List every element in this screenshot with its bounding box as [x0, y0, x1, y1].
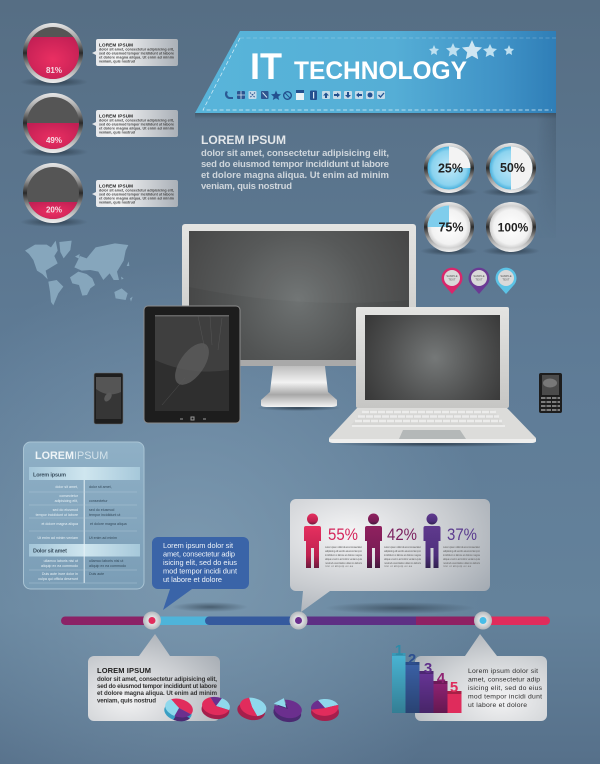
- device: tablet: [144, 306, 240, 423]
- callout: gauge 20% text: dolor sit amet, consectetur adipisicing elit,: [99, 188, 174, 192]
- table heading: LOREMIPSUM: [35, 450, 108, 462]
- pie chart 4: [271, 697, 304, 724]
- table section band 2: [29, 544, 140, 556]
- device: laptop: [329, 307, 536, 447]
- timeline node: red: [143, 612, 161, 630]
- callout: gauge 49% text: et dolore magna aliqua. Ut enim ad minim: [99, 126, 174, 130]
- bar chart: [392, 642, 462, 713]
- callout: lower left text bubble: dolor sit amet, consectetur adipisicing elit,: [97, 676, 217, 683]
- map pin: purple: TEXT: [475, 278, 483, 282]
- table left column: [36, 485, 79, 581]
- stat 37%: adipisicing elit sed do eiusmod tempor: [443, 549, 480, 553]
- stat 55%: nisi ut aliquip ex ea: [325, 564, 354, 568]
- title: [250, 46, 467, 87]
- intro text block: sed do eiusmod tempor incididunt ut labore: [201, 159, 389, 170]
- callout: blue speech bubble: isicing elit, sed do eius: [163, 558, 237, 567]
- gauge: 100%: [482, 202, 540, 256]
- table left column: et dolore magna aliqua: [41, 522, 78, 526]
- title: TECHNOLOGY: [294, 57, 467, 85]
- stars: [429, 40, 514, 59]
- table right column: ullamco laboris nisi ut: [89, 559, 123, 563]
- bar 3: 3: [424, 660, 432, 677]
- title: IT: [250, 46, 282, 87]
- person icon 42%: [365, 514, 382, 568]
- table right column: sed do eiusmod: [89, 508, 114, 512]
- table left column: adipisicing elit,: [55, 499, 78, 503]
- table right column: tempor incididunt ut: [89, 513, 120, 517]
- stat 42%: 42%: [387, 525, 417, 544]
- table left column: ullamco laboris nisi ut: [44, 559, 78, 563]
- pie chart 5: [311, 699, 339, 721]
- gauge: 75%: 75%: [438, 220, 464, 234]
- table left column: tempor incididunt ut labore: [36, 513, 78, 517]
- callout: gauge 20% text: et dolore magna aliqua. Ut enim ad minim: [99, 196, 174, 200]
- stat 42%: Lorem ipsum dolor sit amet consectetur: [384, 545, 421, 549]
- stat 42%: incididunt ut labore et dolore magna: [384, 553, 422, 557]
- gauge: 49%: [23, 93, 84, 156]
- ribbon banner: [195, 31, 556, 119]
- callout: lower right text bubble: [415, 634, 547, 721]
- stat 55%: adipisicing elit sed do eiusmod tempor: [325, 549, 362, 553]
- gauge: 81%: 81%: [46, 66, 62, 75]
- table left column: Ut enim ad minim veniam: [37, 536, 78, 540]
- stat 37%: Lorem ipsum dolor sit amet consectetur: [443, 545, 480, 549]
- callout: gauge 20% text: [92, 180, 178, 207]
- gauge: 25%: [420, 143, 478, 196]
- gauge: 50%: [482, 143, 540, 196]
- table right column: Duis aute: [89, 572, 104, 576]
- table left column: aliquip ex ea commodo: [41, 564, 78, 568]
- gauge: 20%: [23, 163, 84, 226]
- gauge: 25%: 25%: [438, 162, 463, 176]
- callout: gauge 20% text: sed do eiusmod tempor incididunt ut labore: [99, 192, 174, 196]
- gauge: 75%: [420, 202, 478, 256]
- map pin: pink: SAMPLE: [446, 274, 458, 278]
- callout: blue speech bubble: mod tempor incidi dunt: [163, 566, 237, 576]
- stat 42%: nostrud exercitation ullamco laboris: [384, 561, 422, 565]
- callout: gauge 49% text: dolor sit amet, consectetur adipisicing elit,: [99, 118, 174, 122]
- intro text block: LOREM IPSUM: [201, 133, 286, 147]
- table left column: culpa qui officia deserunt: [38, 577, 78, 581]
- callout: gauge 81% text: dolor sit amet, consectetur adipisicing elit,: [99, 48, 174, 52]
- map pin: pink: [442, 268, 463, 294]
- callout: lower left text bubble: LOREM IPSUM: [97, 666, 151, 675]
- callout: lower right text bubble: isicing elit, sed do eius: [468, 685, 543, 692]
- map pin: purple: SAMPLE: [473, 274, 485, 278]
- table left column: sed do eiusmod: [53, 508, 78, 512]
- stat 55%: Lorem ipsum dolor sit amet consectetur: [325, 545, 362, 549]
- device: left smartphone: [94, 373, 123, 424]
- person icon 37%: [424, 514, 440, 568]
- table left column: dolor sit amet,: [55, 485, 78, 489]
- map pin: pink: TEXT: [448, 278, 456, 282]
- table section band 1: [29, 467, 140, 480]
- callout: gauge 49% text: LOREM IPSUM: [99, 114, 133, 118]
- gauge: 81%: [23, 23, 83, 86]
- callout: gauge 81% text: et dolore magna aliqua. Ut enim ad minim: [99, 56, 174, 60]
- callout: lower left text bubble: veniam, quis nostrud: [97, 698, 156, 704]
- stat 42%: [384, 525, 422, 568]
- table right column: aliquip ex ea commodo: [89, 564, 126, 568]
- callout: blue speech bubble: amet, consectetur adip: [163, 550, 235, 558]
- bar 2: 2: [408, 651, 416, 668]
- table left column: Duis aute irure dolor in: [42, 572, 78, 576]
- timeline: [61, 612, 550, 630]
- intro text block: et dolore magna aliqua. Ut enim ad minim: [201, 170, 389, 181]
- callout: lower right text bubble: amet, consectetur adip: [468, 676, 540, 684]
- table section band 1: Lorem ipsum: [33, 472, 66, 478]
- stat 55%: nostrud exercitation ullamco laboris: [325, 561, 363, 565]
- person icon 55%: [304, 514, 321, 568]
- callout: gauge 49% text: sed do eiusmod tempor incididunt ut labore: [99, 122, 174, 126]
- table right column: consectetur: [89, 499, 108, 503]
- callout: gauge 49% text: veniam, quis nostrud: [99, 130, 135, 134]
- panel: data table: [24, 442, 144, 589]
- callout: gauge 81% text: sed do eiusmod tempor incididunt ut labore: [99, 52, 174, 56]
- callout: people statistics bubble: [290, 499, 490, 614]
- callout: gauge 49% text: [92, 110, 178, 137]
- laptop trackpad: [399, 430, 466, 439]
- world map: [25, 241, 133, 305]
- stat 55%: 55%: [328, 525, 358, 544]
- bar 1: 1: [395, 642, 403, 659]
- callout: lower left text bubble: [88, 634, 220, 721]
- stat 42%: aliqua ut enim ad minim veniam quis: [384, 557, 422, 561]
- bar 4: 4: [437, 670, 446, 687]
- intro text block: [201, 133, 389, 192]
- stat 37%: incididunt ut labore et dolore magna: [443, 553, 481, 557]
- callout: blue speech bubble: [152, 537, 249, 612]
- icon row: [225, 90, 385, 100]
- stat 55%: aliqua ut enim ad minim veniam quis: [325, 557, 363, 561]
- stat 42%: adipisicing elit sed do eiusmod tempor: [384, 549, 421, 553]
- gauge: 20%: 20%: [46, 206, 62, 214]
- intro text block: dolor sit amet, consectetur adipisicing elit,: [201, 148, 389, 159]
- table section band 2: Dolor sit amet: [33, 548, 67, 554]
- timeline node: purple: [290, 612, 308, 630]
- gauge: 50%: 50%: [500, 161, 525, 175]
- callout: gauge 81% text: [92, 39, 178, 66]
- callout: gauge 20% text: veniam, quis nostrud: [99, 200, 135, 204]
- map pin: cyan: SAMPLE: [500, 274, 512, 278]
- timeline node: cyan: [474, 612, 492, 630]
- gauge: 100%: 100%: [498, 220, 529, 234]
- callout: gauge 81% text: LOREM IPSUM: [99, 42, 133, 48]
- table right column: Ut enim ad minim: [89, 536, 117, 540]
- gauge: 49%: 49%: [46, 136, 62, 145]
- pie chart 2: [200, 695, 231, 721]
- callout: lower left text bubble: et dolore magna aliqua. Ut enim ad minim: [97, 690, 217, 697]
- callout: blue speech bubble: ut labore et dolore: [163, 575, 222, 584]
- stat 37%: [443, 525, 481, 568]
- stat 37%: aliqua ut enim ad minim veniam quis: [443, 557, 481, 561]
- stat 37%: nostrud exercitation ullamco laboris: [443, 561, 481, 565]
- table left column: consectetur: [59, 494, 79, 498]
- pie chart 3: [236, 695, 268, 723]
- map pin: purple: [469, 268, 490, 294]
- stat 37%: nisi ut aliquip ex ea: [443, 564, 472, 568]
- callout: gauge 81% text: veniam, quis nostrud: [99, 60, 135, 64]
- stat 42%: nisi ut aliquip ex ea: [384, 564, 413, 568]
- table right column: dolor sit amet,: [89, 485, 112, 489]
- callout: lower right text bubble: Lorem ipsum dolor sit: [468, 668, 538, 675]
- table right column: [89, 485, 127, 576]
- laptop keyboard: [351, 410, 505, 426]
- bar 5: 5: [450, 679, 458, 696]
- callout: lower right text bubble: ut labore et dolore: [468, 702, 527, 709]
- map pin: cyan: [496, 268, 516, 294]
- callout: lower right text bubble: mod tempor incidi dunt: [468, 694, 542, 700]
- map pin: cyan: TEXT: [502, 278, 510, 282]
- stat 55%: [325, 525, 363, 568]
- table right column: et dolore magna aliqua: [90, 522, 127, 526]
- callout: gauge 20% text: LOREM IPSUM: [99, 184, 133, 188]
- intro text block: veniam, quis nostrud: [201, 181, 292, 192]
- device: desktop monitor: [182, 224, 416, 411]
- callout: lower left text bubble: sed do eiusmod tempor incididunt ut labore: [97, 683, 218, 690]
- stat 55%: incididunt ut labore et dolore magna: [325, 553, 363, 557]
- stat 37%: 37%: [447, 525, 477, 544]
- device: right mobile phone: [539, 373, 562, 413]
- callout: blue speech bubble: Lorem ipsum dolor sit: [163, 541, 233, 550]
- pie chart 1: [162, 696, 195, 724]
